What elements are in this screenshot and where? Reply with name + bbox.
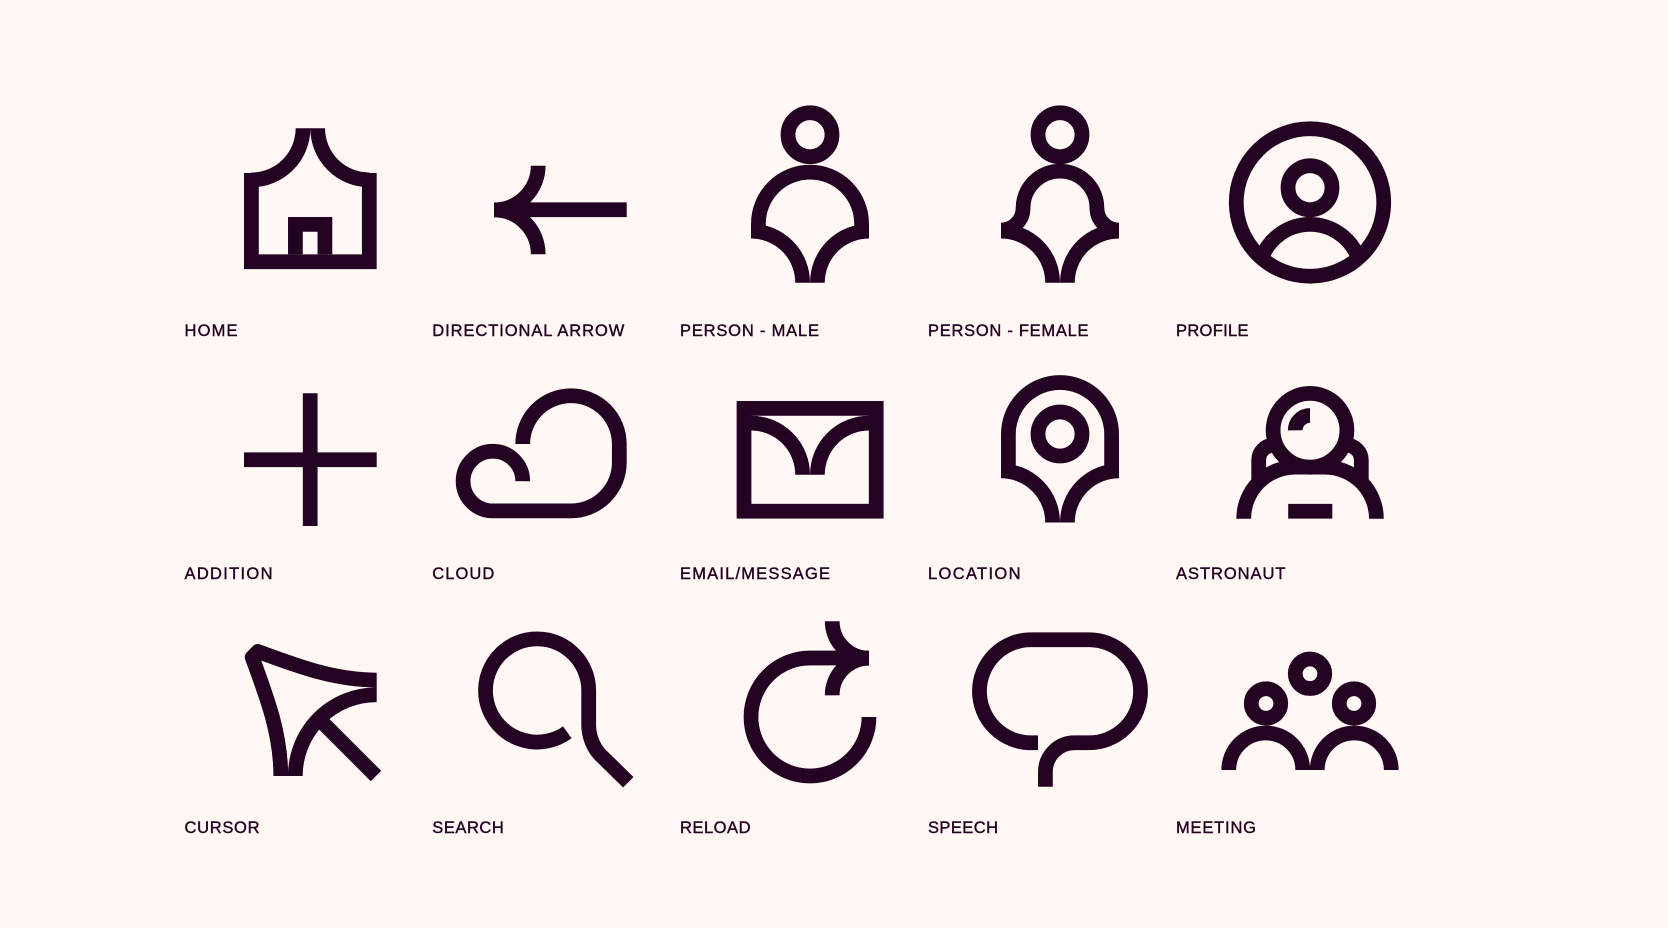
- icon: cursor: [252, 652, 377, 776]
- label: email message: EMAIL/MESSAGE: [680, 565, 830, 583]
- icon: reload: [751, 621, 869, 776]
- icon: search: [486, 639, 628, 782]
- label: meeting: MEETING: [1176, 819, 1256, 837]
- label: addition: ADDITION: [184, 565, 272, 583]
- label: profile: PROFILE: [1176, 322, 1248, 340]
- icon: astronaut: [1244, 393, 1376, 519]
- label: directional arrow: DIRECTIONAL ARROW: [432, 322, 625, 340]
- label: cursor: CURSOR: [184, 819, 260, 837]
- label: home: HOME: [184, 322, 238, 340]
- icon: home: [251, 128, 369, 262]
- label: astronaut: ASTRONAUT: [1176, 565, 1286, 583]
- icon: person male: [751, 113, 869, 283]
- icon: location: [1001, 382, 1119, 522]
- icon: cloud: [463, 396, 619, 511]
- label: location: LOCATION: [928, 565, 1020, 583]
- label: speech: SPEECH: [928, 819, 998, 837]
- label: search: SEARCH: [432, 819, 504, 837]
- icon: addition: [244, 393, 377, 526]
- icon: person female: [1001, 113, 1119, 283]
- icon: profile: [1236, 129, 1384, 276]
- label: person female: PERSON - FEMALE: [928, 322, 1088, 340]
- icon: speech: [979, 640, 1141, 787]
- icon: email message: [744, 408, 876, 511]
- label: person male: PERSON - MALE: [680, 322, 819, 340]
- label: reload: RELOAD: [680, 819, 751, 837]
- icon: directional arrow: [494, 166, 627, 254]
- icon: meeting: [1229, 659, 1391, 770]
- label: cloud: CLOUD: [432, 565, 494, 583]
